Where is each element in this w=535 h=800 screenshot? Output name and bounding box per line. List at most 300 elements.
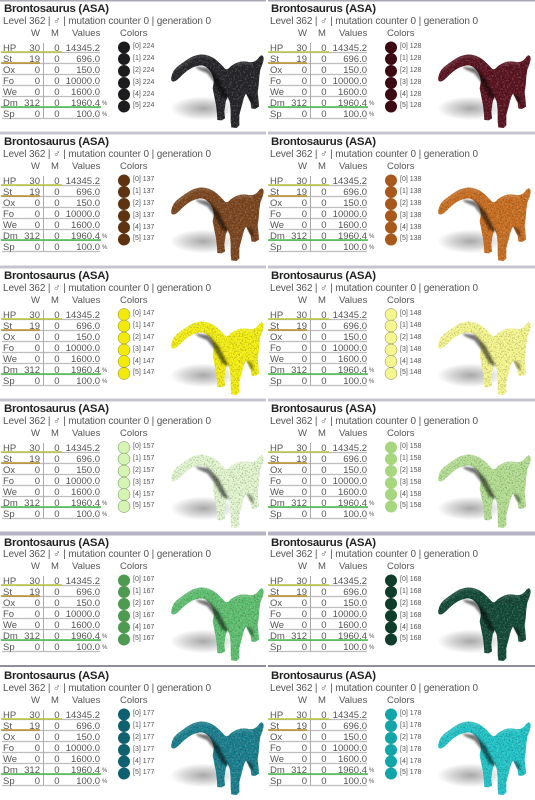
stat table: St: [270, 454, 279, 465]
stat table: 0: [302, 465, 307, 476]
stat table: 150.0: [343, 332, 367, 343]
stat table: [268, 710, 375, 787]
table header: Values: [72, 428, 101, 439]
color labels: [2] 157: [133, 467, 155, 474]
stat table: 10000.0: [333, 743, 367, 754]
color labels: [133, 43, 155, 109]
stat table: Dm: [270, 98, 285, 109]
stat table: 0: [321, 198, 326, 209]
stat table: Sp: [3, 242, 15, 253]
stat table: 100.0: [76, 376, 100, 387]
stat table: 0: [321, 732, 326, 743]
stat table: 0: [54, 198, 60, 209]
stat table: 0: [54, 242, 60, 253]
stat table: Ox: [270, 732, 282, 743]
stat table: 10000.0: [66, 76, 100, 87]
color labels: [4] 158: [400, 491, 422, 498]
stat table: 1600.0: [338, 754, 367, 765]
color labels: [3] 138: [400, 212, 422, 219]
stat table: 696.0: [76, 321, 100, 332]
title: Brontosaurus (ASA): [271, 537, 376, 549]
stat table: 14345.2: [333, 576, 367, 587]
color labels: [4] 177: [133, 758, 155, 765]
stat table: 0: [321, 343, 326, 354]
stat table: 0: [35, 776, 40, 787]
stat table: 0: [321, 332, 326, 343]
stat table: 14345.2: [66, 710, 100, 721]
table header: Colors: [120, 161, 148, 172]
stat table: 0: [35, 220, 40, 231]
title: Brontosaurus (ASA): [4, 136, 109, 148]
stat table: 1960.4: [71, 765, 100, 776]
stat table: We: [270, 620, 284, 631]
stat table: 0: [54, 87, 60, 98]
stat table: 0: [302, 109, 307, 120]
stat table: 0: [54, 54, 60, 65]
stat table: 19: [296, 54, 307, 65]
stat table: 0: [321, 498, 326, 509]
stat table: 0: [321, 620, 326, 631]
stat table: Dm: [270, 765, 285, 776]
dinosaur: [170, 722, 264, 795]
color labels: [5] 224: [133, 102, 155, 109]
table header: [31, 561, 148, 572]
stat table: 150.0: [343, 198, 367, 209]
stat table: 1960.4: [338, 365, 367, 376]
header band: [0, 266, 266, 268]
color labels: [5] 148: [400, 369, 422, 376]
stat table: 0: [321, 587, 326, 598]
stat table: 0: [321, 721, 326, 732]
title: Brontosaurus (ASA): [271, 670, 376, 682]
stat table: 0: [54, 310, 60, 321]
stat table: 0: [35, 609, 40, 620]
color labels: [0] 157: [133, 443, 155, 450]
stat table: 0: [54, 43, 60, 54]
color labels: [133, 443, 155, 509]
panel: color 168: [268, 532, 535, 661]
stat table: 1600.0: [338, 220, 367, 231]
stat table: St: [270, 187, 279, 198]
color labels: [4] 178: [400, 758, 422, 765]
stat table: Dm: [3, 498, 18, 509]
color swatches: [118, 42, 130, 112]
stat table: 14345.2: [333, 176, 367, 187]
stat table: 10000.0: [333, 476, 367, 487]
stat table: We: [270, 754, 284, 765]
stat table: 150.0: [76, 732, 100, 743]
title: Brontosaurus (ASA): [271, 136, 376, 148]
stat table: Sp: [3, 509, 15, 520]
stat table: HP: [270, 576, 283, 587]
table header: [298, 28, 415, 39]
stat table: 312: [291, 365, 307, 376]
color labels: [0] 167: [133, 576, 155, 583]
color labels: [1] 128: [400, 55, 422, 62]
stat table: 0: [54, 509, 60, 520]
stat table: 0: [302, 332, 307, 343]
color labels: [1] 137: [133, 188, 155, 195]
stat table: 100.0: [76, 242, 100, 253]
stat table: Fo: [3, 743, 14, 754]
stat table: %: [102, 379, 108, 385]
stat table: 10000.0: [333, 343, 367, 354]
stat table: 0: [321, 187, 326, 198]
stat table: 0: [54, 443, 60, 454]
stat table: 0: [321, 98, 326, 109]
stat table: 30: [296, 176, 307, 187]
stat table: 0: [54, 176, 60, 187]
stat table: HP: [3, 710, 16, 721]
stat table: Ox: [3, 332, 15, 343]
stat table: 14345.2: [333, 43, 367, 54]
stat table: 0: [35, 598, 40, 609]
color labels: [1] 138: [400, 188, 422, 195]
color labels: [0] 224: [133, 43, 155, 50]
stat table: Sp: [270, 642, 282, 653]
stat table: Dm: [270, 498, 285, 509]
color labels: [0] 177: [133, 710, 155, 717]
color labels: [3] 157: [133, 479, 155, 486]
stat table: Fo: [270, 76, 281, 87]
stat table: Fo: [3, 476, 14, 487]
stat table: %: [369, 768, 375, 774]
stat table: 0: [321, 443, 326, 454]
table header: Values: [339, 428, 368, 439]
stat table: 312: [24, 98, 40, 109]
stat table: 19: [29, 187, 40, 198]
table header: Values: [339, 295, 368, 306]
color labels: [1] 148: [400, 322, 422, 329]
stat table: 312: [291, 631, 307, 642]
stat table: 0: [302, 65, 307, 76]
panel: color 138: [268, 132, 535, 261]
stat table: 312: [24, 765, 40, 776]
stat table: Fo: [270, 476, 281, 487]
color labels: [133, 576, 155, 642]
stat table: %: [102, 512, 108, 518]
stat table: 0: [302, 620, 307, 631]
stat table: Ox: [270, 465, 282, 476]
stat table: %: [102, 234, 108, 240]
color swatches: [385, 42, 397, 112]
stat table: Fo: [270, 343, 281, 354]
table header: W: [298, 28, 307, 39]
stat table: %: [102, 112, 108, 118]
subtitle: Level 362 | ♂ | mutation counter 0 | generation 0: [270, 549, 478, 560]
stat table: 30: [29, 710, 40, 721]
color labels: [5] 178: [400, 769, 422, 776]
header band: [0, 398, 266, 402]
stat table: 696.0: [76, 721, 100, 732]
stat table: 0: [54, 321, 60, 332]
subtitle: Level 362 | ♂ | mutation counter 0 | generation 0: [3, 416, 211, 427]
stat table: 30: [296, 43, 307, 54]
stat table: 100.0: [343, 242, 367, 253]
stat table: 14345.2: [66, 443, 100, 454]
panel: color 137: [0, 132, 266, 261]
table header: [31, 695, 148, 706]
stat table: 312: [291, 765, 307, 776]
stat table: Ox: [270, 65, 282, 76]
stat table: 30: [29, 310, 40, 321]
stat table: 0: [321, 598, 326, 609]
stat table: 0: [302, 354, 307, 365]
stat table: 0: [302, 87, 307, 98]
color labels: [0] 128: [400, 43, 422, 50]
stat table: Dm: [270, 365, 285, 376]
stat table: 312: [291, 98, 307, 109]
table header: Colors: [120, 561, 148, 572]
stat table: 10000.0: [66, 476, 100, 487]
stat table: 0: [54, 98, 60, 109]
stat table: St: [270, 587, 279, 598]
stat table: 0: [54, 65, 60, 76]
color labels: [1] 178: [400, 722, 422, 729]
stat table: 0: [321, 743, 326, 754]
table header: Values: [72, 695, 101, 706]
stat table: 0: [54, 209, 60, 220]
color labels: [2] 178: [400, 734, 422, 741]
color labels: [1] 167: [133, 588, 155, 595]
header band: [268, 398, 535, 402]
stat table: 0: [54, 465, 60, 476]
color labels: [400, 576, 422, 642]
stat table: 0: [321, 109, 326, 120]
color labels: [4] 128: [400, 91, 422, 98]
stat table: 0: [321, 220, 326, 231]
dinosaur: [437, 588, 531, 661]
header band: [0, 0, 266, 2]
panel: color 177: [0, 665, 266, 795]
color labels: [3] 167: [133, 612, 155, 619]
subtitle: Level 362 | ♂ | mutation counter 0 | generation 0: [3, 683, 211, 694]
stat table: 14345.2: [66, 576, 100, 587]
color labels: [4] 167: [133, 624, 155, 631]
stat table: %: [369, 245, 375, 251]
table header: Values: [72, 161, 101, 172]
stat table: We: [270, 354, 284, 365]
stat table: 696.0: [343, 187, 367, 198]
stat table: %: [369, 234, 375, 240]
stat table: 0: [54, 732, 60, 743]
stat table: 0: [54, 620, 60, 631]
stat table: Fo: [270, 209, 281, 220]
panel: color 224: [0, 0, 266, 128]
stat table: %: [369, 779, 375, 785]
stat table: 0: [302, 76, 307, 87]
dinosaur: [437, 722, 531, 795]
stat table: 312: [24, 631, 40, 642]
stat table: Ox: [270, 332, 282, 343]
stat table: 312: [24, 365, 40, 376]
stat table: 0: [321, 509, 326, 520]
title: Brontosaurus (ASA): [4, 3, 109, 15]
stat table: 1960.4: [71, 498, 100, 509]
table header: Values: [339, 161, 368, 172]
stat table: Dm: [270, 231, 285, 242]
header band: [268, 665, 535, 667]
stat table: We: [270, 87, 284, 98]
stat table: 0: [54, 498, 60, 509]
stat table: 150.0: [76, 332, 100, 343]
stat table: [1, 176, 108, 253]
stat table: 150.0: [76, 198, 100, 209]
stat table: Sp: [270, 509, 282, 520]
stat table: %: [369, 112, 375, 118]
stat table: 0: [302, 220, 307, 231]
stat table: %: [369, 379, 375, 385]
header band: [268, 532, 535, 536]
stat table: %: [369, 512, 375, 518]
stat table: 0: [321, 87, 326, 98]
stat table: 0: [321, 54, 326, 65]
stat table: 14345.2: [66, 176, 100, 187]
stat table: 30: [29, 443, 40, 454]
table header: M: [51, 561, 59, 572]
stat table: 0: [321, 321, 326, 332]
color labels: [4] 137: [133, 224, 155, 231]
stat table: 1960.4: [338, 231, 367, 242]
stat table: 0: [54, 631, 60, 642]
color labels: [2] 224: [133, 67, 155, 74]
table header: M: [51, 428, 59, 439]
stat table: 1960.4: [338, 498, 367, 509]
stat table: Sp: [3, 376, 15, 387]
table header: Colors: [120, 28, 148, 39]
panel: color 167: [0, 532, 266, 661]
subtitle: Level 362 | ♂ | mutation counter 0 | generation 0: [270, 16, 478, 27]
stat table: Ox: [3, 598, 15, 609]
color swatches: [385, 708, 397, 780]
stat table: 0: [35, 343, 40, 354]
color labels: [3] 177: [133, 746, 155, 753]
stat table: 0: [54, 743, 60, 754]
stat table: 100.0: [76, 509, 100, 520]
color labels: [133, 310, 155, 376]
stat table: 1960.4: [71, 365, 100, 376]
stat table: 0: [321, 231, 326, 242]
stat table: [1, 443, 108, 520]
stat table: 0: [321, 76, 326, 87]
color labels: [5] 168: [400, 635, 422, 642]
stat table: 14345.2: [66, 310, 100, 321]
stat table: 10000.0: [66, 609, 100, 620]
stat table: 0: [321, 754, 326, 765]
stat table: HP: [270, 310, 283, 321]
subtitle: Level 362 | ♂ | mutation counter 0 | generation 0: [3, 549, 211, 560]
color labels: [4] 224: [133, 91, 155, 98]
stat table: 0: [54, 576, 60, 587]
stat table: 312: [291, 231, 307, 242]
stat table: 0: [35, 242, 40, 253]
stat table: %: [369, 645, 375, 651]
stat table: 0: [54, 109, 60, 120]
color swatches: [118, 308, 130, 380]
stat table: 19: [296, 187, 307, 198]
color swatches: [385, 174, 397, 246]
stat table: HP: [3, 443, 16, 454]
stat table: 0: [302, 509, 307, 520]
subtitle: Level 362 | ♂ | mutation counter 0 | generation 0: [3, 149, 211, 160]
stat table: Ox: [3, 65, 15, 76]
color labels: [400, 310, 422, 376]
stat table: %: [102, 368, 108, 374]
stat table: 312: [24, 498, 40, 509]
stat table: 1960.4: [338, 631, 367, 642]
stat table: 0: [321, 354, 326, 365]
color labels: [3] 158: [400, 479, 422, 486]
table header: M: [51, 161, 59, 172]
table header: W: [31, 28, 40, 39]
color labels: [3] 137: [133, 212, 155, 219]
stat table: HP: [3, 576, 16, 587]
stat table: [268, 310, 375, 387]
stat table: %: [102, 634, 108, 640]
color labels: [4] 148: [400, 358, 422, 365]
stat table: 14345.2: [66, 43, 100, 54]
table header: [298, 161, 415, 172]
panel: color 148: [268, 266, 535, 395]
stat table: 696.0: [343, 587, 367, 598]
stat table: We: [3, 754, 17, 765]
stat table: 1600.0: [71, 754, 100, 765]
panel: color 158: [268, 398, 535, 528]
stat table: 100.0: [76, 109, 100, 120]
stat table: We: [3, 487, 17, 498]
stat table: [1, 43, 108, 120]
stat table: 30: [296, 310, 307, 321]
stat table: We: [3, 354, 17, 365]
stat table: 0: [54, 332, 60, 343]
stat table: 19: [29, 721, 40, 732]
table header: Colors: [387, 561, 415, 572]
stat table: 0: [35, 476, 40, 487]
panel: color 157: [0, 398, 266, 528]
stat table: 0: [54, 721, 60, 732]
stat table: 312: [24, 231, 40, 242]
stat table: 0: [54, 231, 60, 242]
stat table: 0: [54, 354, 60, 365]
color labels: [5] 128: [400, 102, 422, 109]
stat table: St: [3, 54, 12, 65]
stat table: We: [3, 220, 17, 231]
table header: W: [31, 695, 40, 706]
stat table: HP: [3, 43, 16, 54]
stat table: 0: [35, 76, 40, 87]
dinosaur: [170, 55, 264, 128]
stat table: Dm: [3, 765, 18, 776]
stat table: We: [3, 620, 17, 631]
stat table: 100.0: [343, 109, 367, 120]
stat table: 19: [29, 587, 40, 598]
color swatches: [385, 442, 397, 512]
stat table: 0: [321, 465, 326, 476]
stat table: 1600.0: [71, 487, 100, 498]
color swatches: [385, 574, 397, 646]
table header: [31, 295, 148, 306]
color labels: [2] 138: [400, 200, 422, 207]
stat table: 0: [35, 376, 40, 387]
stat table: 19: [29, 321, 40, 332]
table header: Colors: [120, 295, 148, 306]
stat table: 100.0: [343, 376, 367, 387]
stat table: 19: [296, 587, 307, 598]
stat table: 1600.0: [71, 354, 100, 365]
stat table: 0: [54, 598, 60, 609]
stat table: 0: [54, 710, 60, 721]
stat table: St: [270, 54, 279, 65]
